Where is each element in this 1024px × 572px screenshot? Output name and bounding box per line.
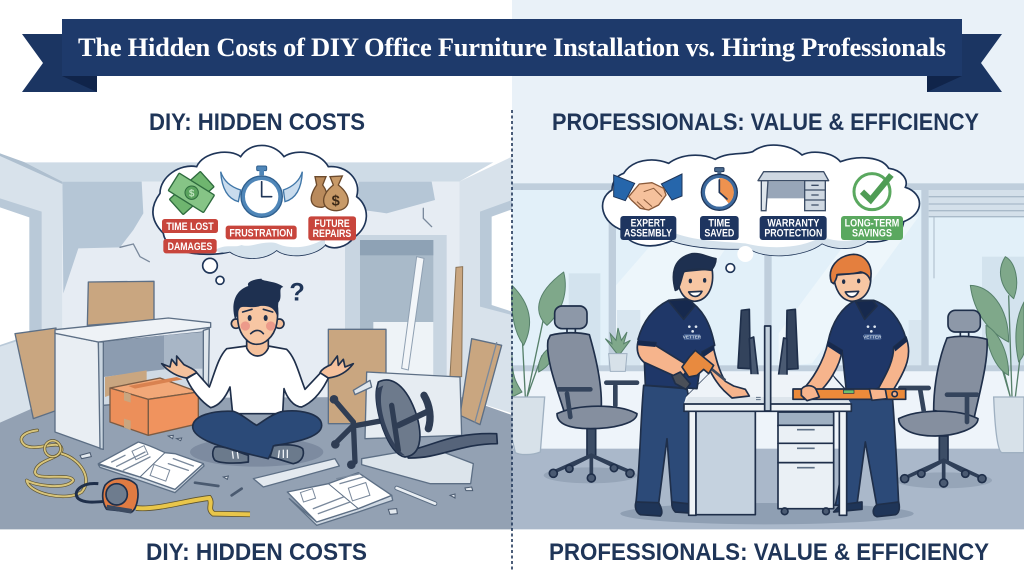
right potted plant xyxy=(970,257,1024,453)
workstation desk with drawers xyxy=(684,326,851,515)
floor xyxy=(0,397,512,529)
white board and bottom panel xyxy=(253,372,473,487)
icon: handshake xyxy=(614,174,682,210)
label: expert assembly: ASSEMBLY xyxy=(624,228,672,240)
monitors on desk xyxy=(737,309,799,383)
panel: DIY messy room scene xyxy=(0,153,512,529)
worker head and hair xyxy=(673,254,716,301)
logo on polo: VETTER xyxy=(863,335,882,340)
cordless drill xyxy=(672,350,725,389)
right worker with spirit level xyxy=(802,254,909,397)
unfinished desk xyxy=(55,318,211,449)
office wall, windows and blinds xyxy=(512,183,1024,529)
label: time saved xyxy=(700,216,739,240)
left office chair xyxy=(544,306,637,483)
label: long-term savings: LONG-TERM xyxy=(845,218,899,230)
label: expert assembly xyxy=(620,216,676,240)
label: future repairs: FUTURE xyxy=(314,218,350,230)
icon: stopwatch with wings xyxy=(221,166,302,217)
coiled rope xyxy=(21,430,86,496)
worker head and hair xyxy=(830,254,871,301)
logo on polo xyxy=(683,325,702,340)
office floor xyxy=(512,449,1024,529)
question mark: ? xyxy=(289,278,305,306)
label: frustration: FRUSTRATION xyxy=(229,227,293,239)
thought cloud: professional value xyxy=(603,145,919,272)
title ribbon banner xyxy=(22,19,1002,92)
workers' legs and shoes xyxy=(635,385,899,517)
label: future repairs: REPAIRS xyxy=(313,228,351,240)
heading: professionals top: PROFESSIONALS: VALUE & EFFICIENCY xyxy=(552,109,979,136)
thought cloud: DIY hidden costs xyxy=(153,145,366,284)
panel: professionals office scene xyxy=(512,183,1024,529)
right office chair xyxy=(895,310,992,488)
open instruction manual, right xyxy=(287,473,393,525)
small plant on windowsill xyxy=(605,328,630,371)
icon: money bags xyxy=(311,176,348,211)
floor shadow under desk xyxy=(620,503,914,524)
heading: DIY top: DIY: HIDDEN COSTS xyxy=(149,109,365,136)
cardboard panels leaning on walls xyxy=(15,281,502,425)
label: damages: DAMAGES xyxy=(168,241,212,253)
open instruction manual, left xyxy=(98,442,204,493)
person sitting cross-legged, confused xyxy=(162,278,353,467)
hands xyxy=(162,356,197,378)
left potted plant xyxy=(512,272,565,455)
label: expert assembly: EXPERT xyxy=(631,218,666,230)
icon: crossed banknotes: $ xyxy=(189,188,195,199)
label: future repairs xyxy=(308,216,356,240)
caption: professionals bottom: PROFESSIONALS: VALUE & EFFICIENCY xyxy=(549,539,989,566)
orange cardboard box xyxy=(110,377,198,435)
caption: DIY bottom: DIY: HIDDEN COSTS xyxy=(146,539,367,566)
thought bubbles xyxy=(726,246,753,272)
drawer pedestal xyxy=(778,412,834,515)
thought bubbles xyxy=(203,258,224,284)
icon: stopwatch xyxy=(701,168,737,210)
label: warranty protection: WARRANTY xyxy=(767,218,819,230)
label: time saved: TIME xyxy=(708,218,730,230)
title: The Hidden Costs of DIY Office Furniture Installation vs. Hiring Professionals xyxy=(78,32,946,62)
icon: office desk xyxy=(758,172,829,211)
pencil and scattered debris xyxy=(80,435,473,514)
label: long-term savings xyxy=(841,216,903,240)
crossed legs xyxy=(193,411,322,459)
label: time lost: TIME LOST xyxy=(166,221,214,233)
orange spirit level xyxy=(793,386,906,401)
logo on polo: VETTER xyxy=(683,335,702,340)
icon: money bags: $ xyxy=(332,193,340,209)
shoes xyxy=(213,447,248,463)
icon: crossed banknotes xyxy=(168,171,214,215)
icon: green check xyxy=(854,174,891,210)
toppled office chair xyxy=(330,380,497,469)
label: warranty protection: PROTECTION xyxy=(764,228,822,240)
label: time saved: SAVED xyxy=(704,228,735,240)
dotted centre divider xyxy=(511,110,513,572)
head xyxy=(231,279,284,344)
logo on polo xyxy=(863,325,882,340)
neck xyxy=(247,339,268,356)
label: warranty protection xyxy=(760,216,827,240)
left worker with drill xyxy=(637,254,749,398)
label: long-term savings: SAVINGS xyxy=(852,228,892,240)
shirt and arms xyxy=(187,346,328,414)
tape measure xyxy=(76,478,250,514)
room walls and ceiling xyxy=(0,153,512,425)
